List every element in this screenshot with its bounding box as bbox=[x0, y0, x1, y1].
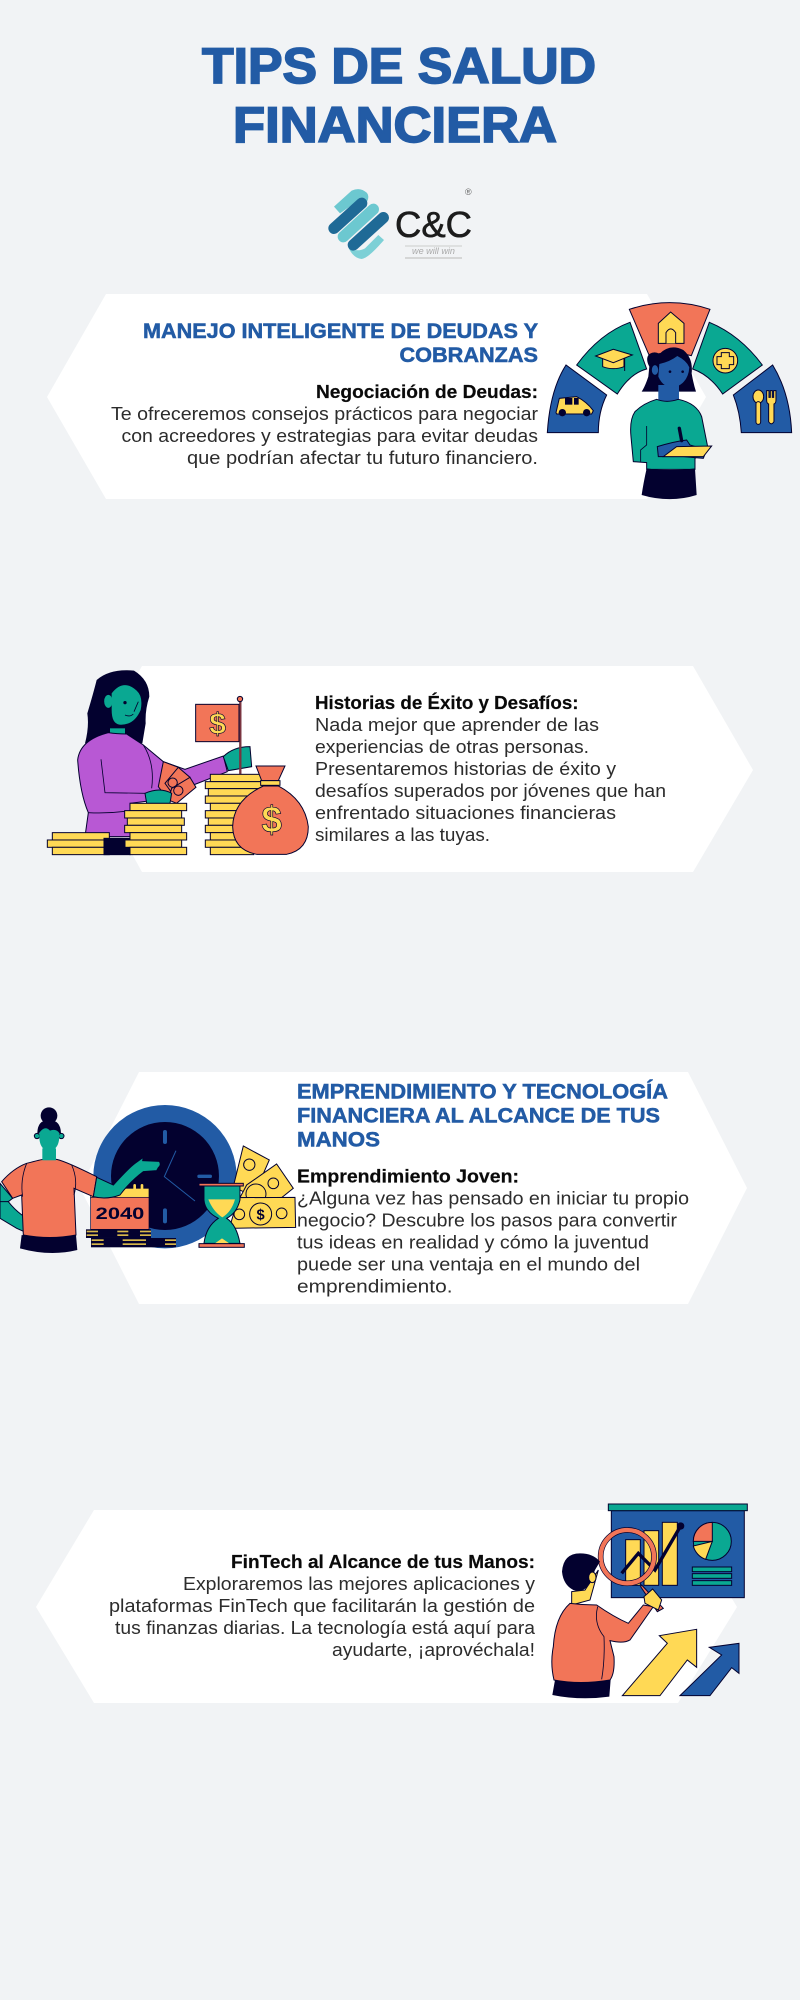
text block: negociación de deudas: Te ofreceremos consejos prácticos para negociar bbox=[111, 403, 538, 424]
figure: man with magnifier bbox=[552, 1530, 663, 1698]
heading: emprendimiento y tecnología: MANOS bbox=[297, 1129, 380, 1152]
logo: C&C: we will win bbox=[412, 246, 455, 256]
text block: fintech al alcance: Exploraremos las mejores aplicaciones y bbox=[183, 1573, 536, 1594]
icon: house sector bbox=[629, 303, 710, 356]
text block: historias de éxito y desafíos: Historias de Éxito y Desafíos: bbox=[315, 692, 578, 713]
figure: woman writing bbox=[631, 347, 712, 499]
text block: fintech al alcance bbox=[109, 1551, 536, 1660]
illustration: woman with clock, calendar and money bbox=[0, 1105, 296, 1253]
text block: negociación de deudas: que podrían afectar tu futuro financiero. bbox=[187, 447, 538, 468]
illustration: man with magnifier and chart board bbox=[552, 1504, 747, 1698]
text block: emprendimiento joven: ¿Alguna vez has pensado en iniciar tu propio bbox=[297, 1188, 689, 1209]
text block: historias de éxito y desafíos: Nada mejor que aprender de las bbox=[315, 714, 599, 735]
logo: C&C: C&C bbox=[395, 204, 472, 245]
text block: fintech al alcance: tus finanzas diarias. La tecnología está aquí para bbox=[115, 1617, 536, 1638]
icon: banknotes: $ bbox=[257, 1207, 265, 1223]
logo: C&C bbox=[334, 187, 472, 259]
text block: emprendimiento joven: puede ser una ventaja en el mundo del bbox=[297, 1254, 640, 1275]
text block: negociación de deudas: con acreedores y estrategias para evitar deudas bbox=[122, 425, 538, 446]
title: TIPS DE SALUD bbox=[202, 38, 596, 94]
coin stacks bbox=[47, 774, 264, 855]
illustration: woman with coins and money bag bbox=[47, 670, 308, 855]
text block: historias de éxito y desafíos: desafíos superados por jóvenes que han bbox=[315, 780, 666, 801]
arrow: yellow up bbox=[622, 1629, 697, 1696]
icon: money bag: $ bbox=[261, 799, 282, 840]
chart board bbox=[608, 1504, 747, 1598]
title: FINANCIERA bbox=[233, 97, 557, 153]
logo: C&C: ® bbox=[465, 187, 472, 197]
icon: money bag bbox=[233, 766, 308, 854]
panel: manejo de deudas bbox=[47, 294, 706, 499]
text block: historias de éxito y desafíos: experiencias de otras personas. bbox=[315, 736, 589, 757]
icon: food sector bbox=[733, 365, 792, 433]
panel: historias de éxito bbox=[85, 666, 753, 872]
text block: negociación de deudas bbox=[111, 381, 538, 468]
heading: emprendimiento y tecnología: FINANCIERA AL ALCANCE DE TUS bbox=[297, 1105, 660, 1128]
text block: historias de éxito y desafíos: similares a las tuyas. bbox=[315, 824, 490, 845]
panel: emprendimiento y tecnología bbox=[80, 1072, 747, 1304]
heading: manejo inteligente: MANEJO INTELIGENTE DE DEUDAS Y bbox=[143, 320, 538, 343]
heading: manejo inteligente bbox=[143, 320, 538, 367]
icon: clock bbox=[93, 1105, 237, 1248]
text block: fintech al alcance: FinTech al Alcance de tus Manos: bbox=[231, 1551, 535, 1572]
text block: emprendimiento joven: negocio? Descubre los pasos para convertir bbox=[297, 1210, 677, 1231]
icon: car sector bbox=[547, 365, 607, 433]
panel: fintech bbox=[36, 1510, 737, 1703]
icon: dollar flag bbox=[196, 696, 243, 774]
heading: emprendimiento y tecnología: EMPRENDIMIENTO Y TECNOLOGÍA bbox=[297, 1081, 668, 1104]
text block: emprendimiento joven: emprendimiento. bbox=[297, 1276, 452, 1297]
text block: fintech al alcance: plataformas FinTech que facilitarán la gestión de bbox=[109, 1595, 535, 1616]
coin stacks bbox=[86, 1229, 176, 1247]
icon: hourglass bbox=[199, 1183, 244, 1247]
figure: woman presenting bbox=[0, 1107, 160, 1253]
illustration: woman with budget arc bbox=[547, 303, 792, 499]
text block: historias de éxito y desafíos bbox=[315, 692, 666, 845]
icon: calendar 2040: 2040 bbox=[96, 1204, 144, 1223]
icon: banknotes bbox=[229, 1146, 296, 1228]
heading: manejo inteligente: COBRANZAS bbox=[400, 344, 538, 367]
icon: dollar flag: $ bbox=[209, 708, 226, 741]
icon: health sector bbox=[693, 322, 762, 394]
heading: emprendimiento y tecnología bbox=[297, 1081, 668, 1152]
arrow: blue up bbox=[680, 1643, 739, 1696]
text block: negociación de deudas: Negociación de Deudas: bbox=[316, 381, 538, 402]
text block: fintech al alcance: ayudarte, ¡aprovéchala! bbox=[332, 1639, 535, 1660]
icon: graduation sector bbox=[577, 322, 647, 394]
text block: emprendimiento joven bbox=[297, 1166, 689, 1297]
text block: historias de éxito y desafíos: Presentaremos historias de éxito y bbox=[315, 758, 617, 779]
text block: historias de éxito y desafíos: enfrentado situaciones financieras bbox=[315, 802, 616, 823]
text block: emprendimiento joven: tus ideas en realidad y cómo la juventud bbox=[297, 1232, 649, 1253]
text block: emprendimiento joven: Emprendimiento Joven: bbox=[297, 1166, 519, 1187]
icon: calendar 2040 bbox=[91, 1184, 149, 1229]
title bbox=[202, 38, 596, 153]
figure: woman bbox=[78, 670, 252, 837]
